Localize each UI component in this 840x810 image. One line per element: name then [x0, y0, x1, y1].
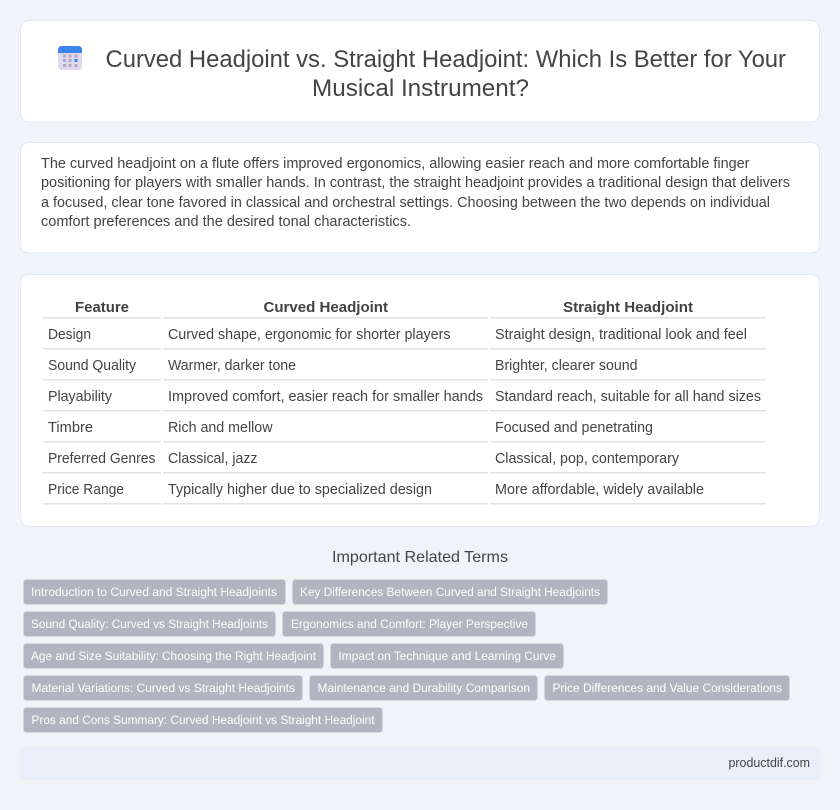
row: Preferred Genres: Classical, jazz: [168, 451, 258, 467]
row: Design: Straight design, traditional look and feel: [495, 327, 747, 343]
tag: technique: Impact on Technique and Learning Curve: [338, 649, 556, 663]
intro paragraph: [41, 156, 790, 230]
tag: pros and cons: Pros and Cons Summary: Curved Headjoint vs Straight Headjoint: [32, 713, 375, 727]
row: Design: Curved shape, ergonomic for shorter players: [168, 327, 450, 343]
tag: ergonomics: [282, 612, 536, 636]
tag: age and size: Age and Size Suitability: Choosing the Right Headjoint: [31, 649, 317, 663]
intro paragraph: a focused, clear tone favored in classical and orchestral settings. Choosing between the two depends on individual: [41, 195, 770, 211]
row: Sound Quality: Sound Quality: [48, 358, 137, 374]
tag: key differences: Key Differences Between Curved and Straight Headjoints: [300, 585, 600, 599]
tag: maintenance: [310, 676, 538, 700]
title text: [106, 46, 786, 102]
panel: introduction: [20, 142, 820, 253]
row: Price Range: Price Range: [48, 482, 124, 498]
tag: age and size: [24, 644, 324, 668]
table header: [43, 300, 766, 318]
row: Preferred Genres: Classical, pop, contemporary: [495, 451, 680, 467]
row: Design: Design: [48, 327, 91, 343]
row: Price Range: Typically higher due to specialized design: [168, 482, 432, 498]
footer: productdif.com: [728, 755, 810, 770]
row: Timbre: Focused and penetrating: [495, 420, 653, 436]
tag: material: Material Variations: Curved vs Straight Headjoints: [32, 681, 295, 695]
heading: important related terms: Important Related Terms: [332, 549, 508, 566]
tag: pros and cons: [24, 708, 382, 732]
tag: introduction: Introduction to Curved and Straight Headjoints: [31, 585, 277, 599]
row: Timbre: Timbre: [48, 420, 93, 436]
intro paragraph: positioning for players with smaller hands. In contrast, the straight headjoint provides a traditional design that delivers: [41, 175, 790, 191]
row: Sound Quality: Warmer, darker tone: [168, 358, 296, 374]
row: Preferred Genres: Preferred Genres: [48, 451, 156, 467]
row: Price Range: More affordable, widely available: [495, 482, 704, 498]
row: Price Range: [43, 482, 766, 504]
tag: technique: [330, 644, 564, 668]
row: Preferred Genres: [43, 451, 766, 474]
tag: material: [24, 676, 302, 700]
tag: sound quality: Sound Quality: Curved vs Straight Headjoints: [31, 617, 268, 631]
row: Design: [43, 327, 766, 350]
row: Playability: [43, 389, 766, 412]
row: Sound Quality: [43, 358, 766, 380]
tag: sound quality: [24, 612, 276, 636]
row: Playability: Improved comfort, easier reach for smaller hands: [168, 389, 483, 405]
panel: comparison table: [20, 274, 820, 526]
row: Timbre: Rich and mellow: [168, 420, 273, 436]
table header: Straight Headjoint: [563, 300, 693, 316]
row: Playability: Playability: [48, 389, 113, 405]
row: Playability: Standard reach, suitable for all hand sizes: [495, 389, 761, 405]
row: Timbre: [43, 420, 766, 442]
title text: Curved Headjoint vs. Straight Headjoint: Which Is Better for Your: [106, 46, 786, 73]
tag: introduction: [24, 580, 286, 604]
footer: [20, 746, 820, 780]
title text: Musical Instrument?: [312, 75, 529, 102]
tag: key differences: [292, 580, 608, 604]
tag: price: [544, 676, 790, 700]
tag: ergonomics: Ergonomics and Comfort: Player Perspective: [291, 617, 528, 631]
panel: title: [20, 20, 820, 122]
icon: calendar: [58, 46, 82, 70]
intro paragraph: comfort preferences and the desired tonal characteristics.: [41, 214, 411, 230]
intro paragraph: The curved headjoint on a flute offers improved ergonomics, allowing easier reach and more comfortable finger: [41, 156, 750, 172]
tag: maintenance: Maintenance and Durability Comparison: [318, 681, 530, 695]
related term tags: [24, 580, 790, 732]
table header: Curved Headjoint: [264, 300, 388, 316]
row: Sound Quality: Brighter, clearer sound: [495, 358, 638, 374]
tag: price: Price Differences and Value Considerations: [552, 681, 782, 695]
table header: Feature: [75, 300, 129, 316]
